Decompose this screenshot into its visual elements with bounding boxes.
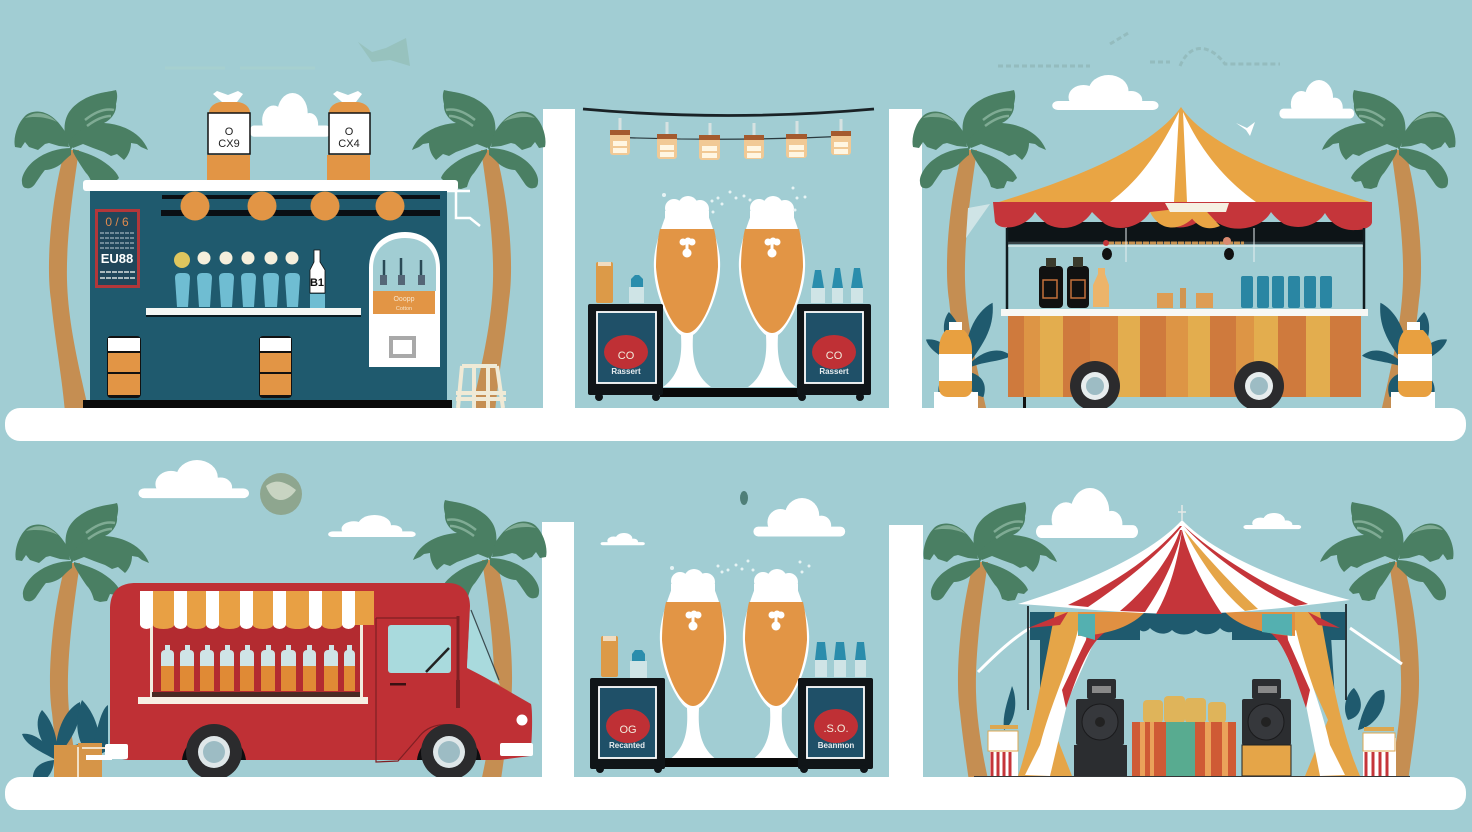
cabinet right: Rassert <box>819 367 849 376</box>
right curtain <box>1225 612 1360 776</box>
cabinet left <box>588 304 663 401</box>
keg right <box>259 336 292 398</box>
rails and lamps <box>161 192 440 220</box>
keg left <box>107 336 141 398</box>
roof bottles <box>207 91 370 181</box>
menu poster: 0 / 6 <box>105 215 129 229</box>
box <box>54 743 105 777</box>
cabinet right: Beanmon <box>818 741 854 750</box>
bubbles <box>662 186 806 214</box>
arched dispenser: Cotton <box>396 306 412 312</box>
shelf <box>146 308 361 315</box>
bar plinth <box>660 758 802 767</box>
white column dividers <box>542 109 923 785</box>
cabinet left: Recanted <box>609 741 645 750</box>
roof bottles: CX4 <box>338 138 360 150</box>
cart body stripes <box>1008 316 1361 397</box>
wheel right <box>1234 361 1284 411</box>
tent poles <box>1028 604 1346 710</box>
striped canopy <box>1018 520 1350 614</box>
serving window <box>150 625 363 697</box>
truck shelf <box>138 697 368 704</box>
blue bottles <box>815 642 866 677</box>
jars on table <box>1143 696 1226 723</box>
tent back wall <box>1030 612 1345 640</box>
lower sky strip <box>0 806 1472 832</box>
base plate <box>83 400 452 408</box>
wheel right <box>421 724 477 780</box>
teal scallop <box>1134 612 1240 634</box>
menu poster <box>95 209 140 288</box>
icon: bird <box>1236 122 1255 136</box>
wheel left <box>1070 361 1120 411</box>
panel: beer glasses top <box>583 109 874 401</box>
frame posts <box>1007 228 1364 310</box>
ground band top <box>5 408 1466 441</box>
roof bottles: CX9 <box>218 138 240 150</box>
roof slab <box>83 180 458 191</box>
counter <box>1001 309 1368 316</box>
panel: beer glasses bottom <box>590 560 873 773</box>
jar and cup <box>601 636 647 678</box>
beer taps <box>174 250 325 308</box>
icon: small seed <box>740 491 748 505</box>
glass left <box>660 569 726 760</box>
cabinet right: .S.O. <box>823 723 849 735</box>
scalloped awning <box>993 202 1372 230</box>
back plants <box>1004 686 1385 730</box>
popcorn box right <box>1363 727 1396 776</box>
bottles row <box>161 645 355 691</box>
shop wall <box>90 190 447 401</box>
roof bottles: O <box>225 126 234 138</box>
panel: bar storefront <box>83 91 506 408</box>
icon: orb <box>260 473 302 515</box>
jar and cup <box>596 262 644 303</box>
panel: red food truck <box>22 583 533 786</box>
cabinet left: CO <box>618 350 635 362</box>
cabinet right <box>797 304 871 401</box>
glass left <box>654 196 720 387</box>
door <box>376 618 466 762</box>
glass right <box>739 196 805 387</box>
panel: striped tent cart <box>926 107 1447 411</box>
blue bottles <box>811 268 863 303</box>
small crates <box>1157 288 1213 308</box>
roof bottles: O <box>345 126 354 138</box>
striped table <box>1132 722 1236 776</box>
plant <box>22 702 96 786</box>
tent roof <box>999 107 1370 202</box>
bumpers and headlight <box>86 714 533 760</box>
panel: circus tent with speakers <box>974 505 1410 779</box>
wheel arches <box>182 734 481 760</box>
awning stripes <box>140 591 374 629</box>
cabinet left <box>590 678 665 773</box>
blue cans <box>1241 276 1332 308</box>
left curtain <box>1018 612 1145 776</box>
windshield <box>467 610 500 685</box>
cabinet left: OG <box>619 724 637 736</box>
guy ropes <box>966 204 990 238</box>
arched dispenser <box>369 232 440 367</box>
bar plinth <box>660 388 800 397</box>
cabinet right <box>798 678 873 773</box>
interior dark strip <box>1007 222 1364 243</box>
plants <box>926 303 1447 399</box>
menu poster: EU88 <box>101 251 133 266</box>
ground band bottom <box>5 777 1466 810</box>
cabinet right: CO <box>826 350 843 362</box>
finial <box>1178 505 1186 520</box>
string lights <box>583 109 874 160</box>
stool <box>456 366 506 408</box>
arched dispenser: Ooopp <box>393 296 415 303</box>
wheel left <box>186 724 242 780</box>
bubbles <box>670 560 810 574</box>
popcorn box left <box>988 725 1018 776</box>
black bottles <box>1039 257 1109 308</box>
bottle left <box>934 322 978 410</box>
cart pole <box>1023 397 1026 409</box>
right speaker <box>1242 679 1291 776</box>
ground line <box>974 776 1410 779</box>
cabinet left: Rassert <box>611 367 641 376</box>
beer taps: B1 <box>310 277 324 289</box>
guy lines <box>978 628 1402 672</box>
hanging string ornaments <box>1102 228 1254 262</box>
bottle right <box>1391 322 1435 410</box>
clouds <box>138 75 1354 545</box>
truck body <box>110 583 532 760</box>
side bracket <box>447 191 480 226</box>
truck cab window <box>388 610 499 708</box>
left speaker <box>1074 679 1127 776</box>
plant right side <box>77 700 108 760</box>
faint banner artefacts <box>165 32 1280 68</box>
glass right <box>743 569 809 760</box>
